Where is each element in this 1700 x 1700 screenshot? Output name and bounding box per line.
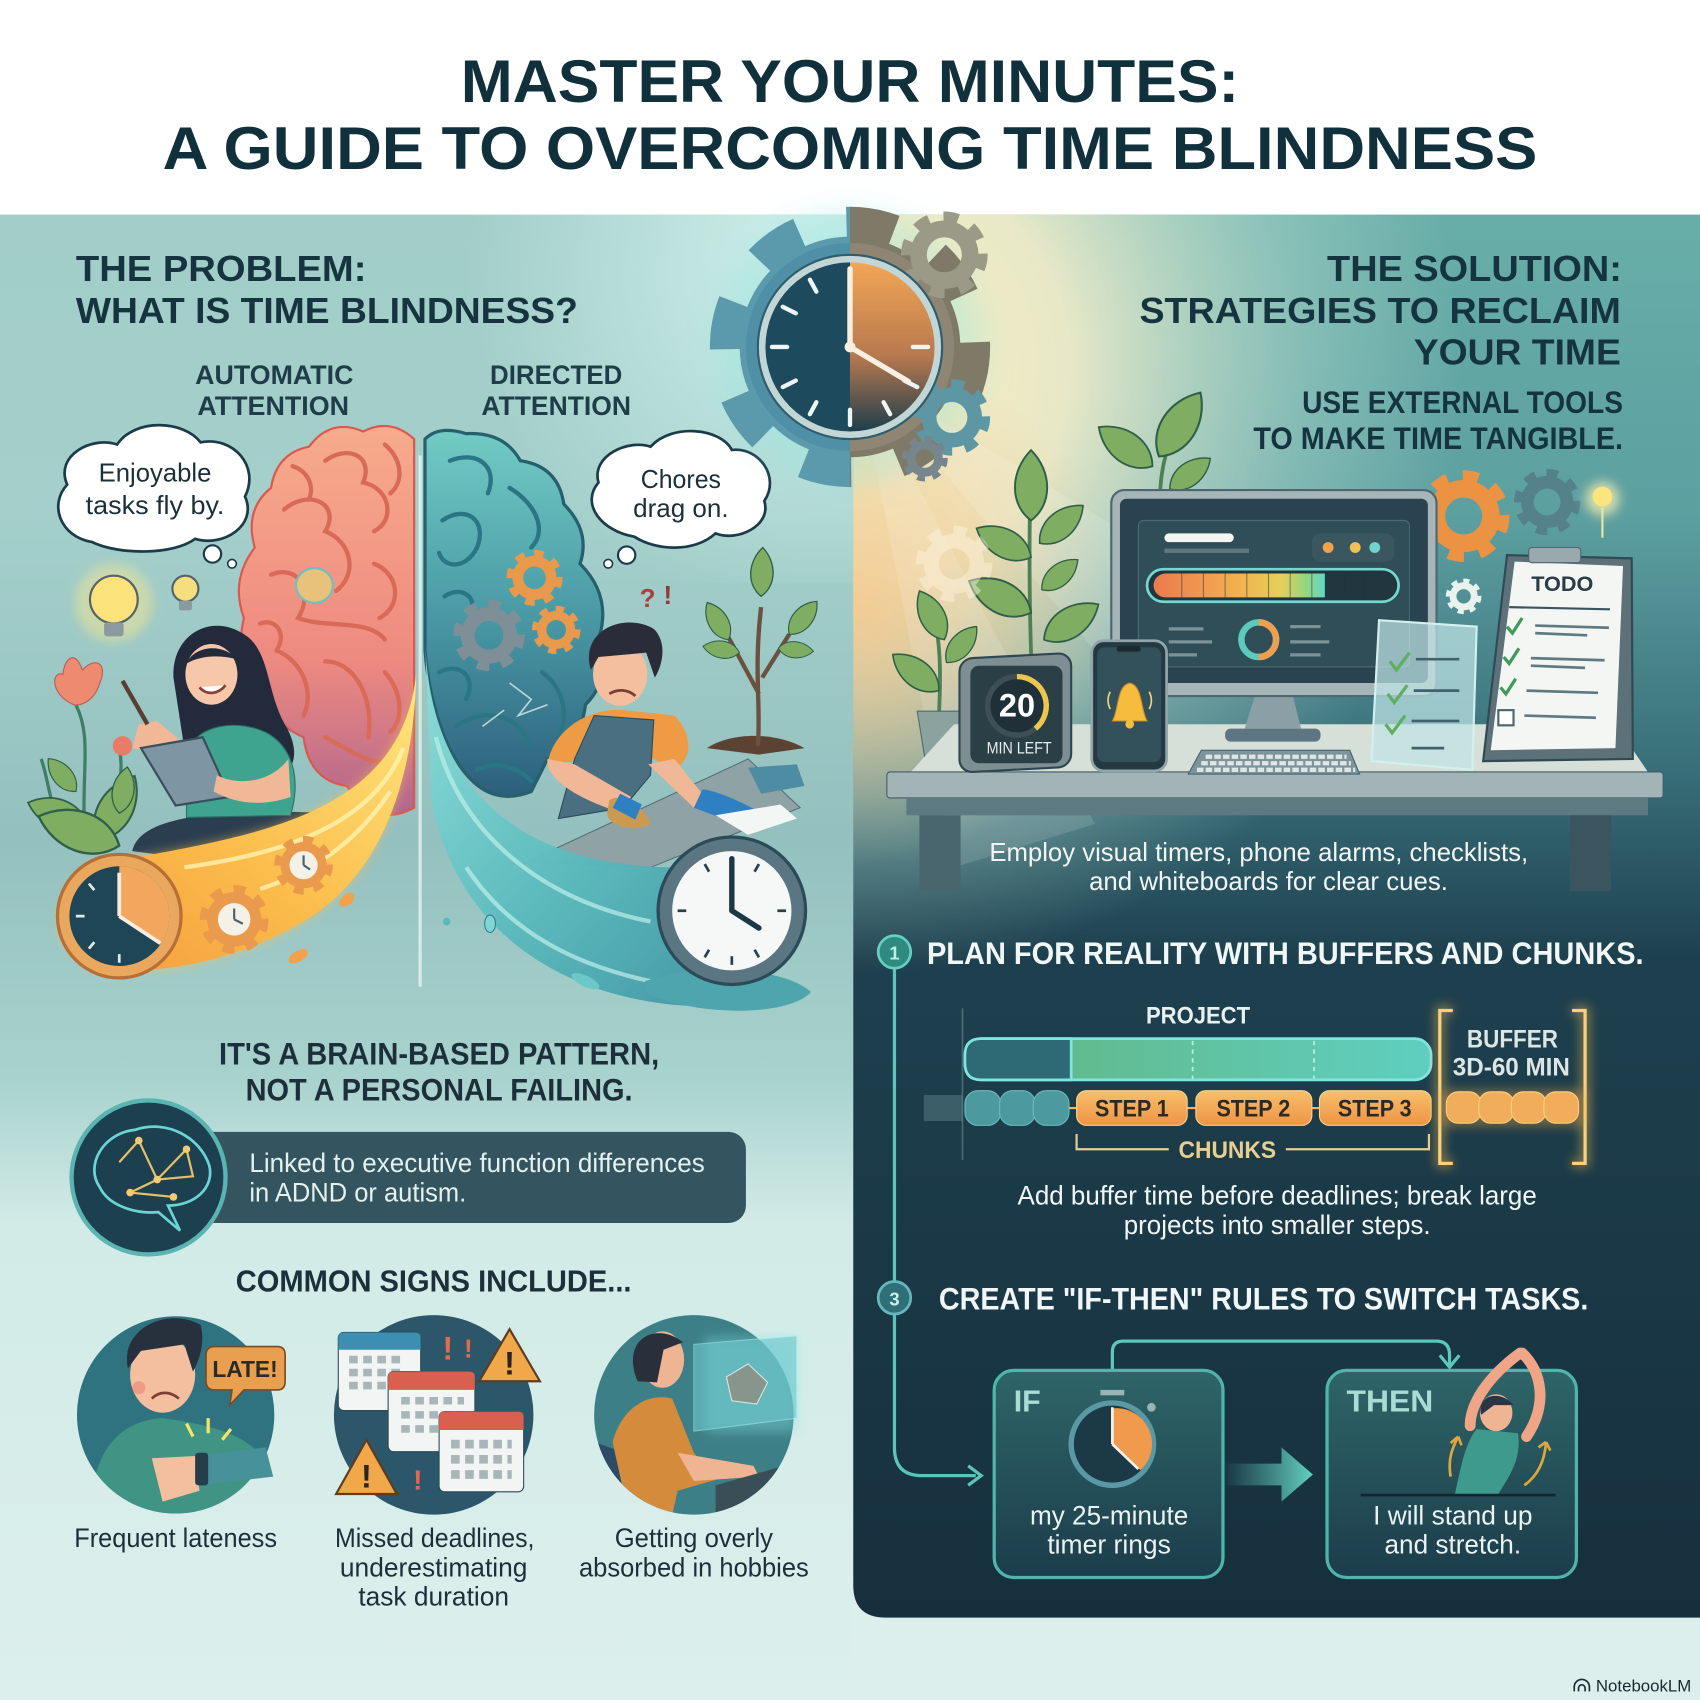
panel: if: timer rings (1047, 1529, 1171, 1560)
illustration: plants (885, 383, 1217, 764)
step marker 3: 3 (889, 1288, 900, 1309)
icon: orange and teal gears (1425, 474, 1620, 611)
panel: then (1327, 1353, 1576, 1577)
caption: missed deadlines: task duration (358, 1581, 509, 1612)
callout: executive function: Linked to executive function differences (249, 1147, 705, 1178)
steps: chunks: STEP 3 (1338, 1096, 1412, 1123)
label: directed attention: DIRECTED (490, 359, 622, 390)
heading: the solution: YOUR TIME (1414, 332, 1621, 372)
panel: if: my 25-minute (1030, 1499, 1188, 1530)
speech cloud: enjoyable tasks (58, 425, 249, 568)
panel: if: IF (1014, 1386, 1041, 1419)
buffer block: 3D-60 MIN (1453, 1054, 1570, 1082)
icon: small gears (905, 218, 984, 478)
illustration: tired brain (425, 430, 603, 796)
buffer block (1440, 1010, 1585, 1163)
icon: missed deadlines: ! (504, 1346, 515, 1382)
speech cloud: enjoyable tasks: Enjoyable (99, 457, 211, 487)
icon: visual timer: MIN LEFT (987, 740, 1052, 758)
steps: chunks: STEP 2 (1216, 1096, 1290, 1123)
icon: missed deadlines: ! (361, 1458, 372, 1494)
project bar (965, 1039, 1431, 1080)
icon: visual timer (960, 653, 1071, 773)
caption: missed deadlines: underestimating (340, 1551, 527, 1582)
step marker 1: 1 (889, 943, 900, 964)
icon: todo clipboard (1483, 548, 1633, 761)
label: project: PROJECT (1146, 1002, 1250, 1029)
step marker 1 (878, 936, 911, 968)
title: MASTER YOUR MINUTES: (461, 47, 1239, 115)
text: employ visual timers: Employ visual timers, phone alarms, checklists, (989, 837, 1528, 867)
speech cloud: chores drag on: drag on. (633, 493, 729, 523)
illustration: joyful brain (239, 426, 414, 815)
statement: brain-based pattern: NOT A PERSONAL FAILING. (246, 1072, 633, 1107)
illustration: wiping man, table and tree: ? (640, 583, 656, 613)
icon: missed deadlines: ! (442, 1331, 453, 1367)
panel: if (994, 1370, 1223, 1577)
title (163, 47, 1537, 182)
illustration: flowers and foliage (23, 658, 149, 864)
heading: the problem: THE PROBLEM: (76, 249, 366, 289)
statement: brain-based pattern (219, 1037, 659, 1107)
illustration: yellow time ribbon (58, 672, 416, 970)
label: directed attention: ATTENTION (481, 390, 631, 421)
arrow: curved top connector (1112, 1341, 1459, 1370)
label: automatic attention (195, 359, 353, 421)
subheading: external tools: TO MAKE TIME TANGIBLE. (1253, 421, 1623, 456)
icon: slow clock (645, 837, 811, 1011)
arrow: timeline connector (894, 968, 981, 1485)
speech cloud: chores drag on: Chores (641, 464, 721, 494)
dots: teal segments (924, 1091, 1069, 1125)
icon: todo clipboard: TODO (1531, 571, 1593, 596)
subheading: external tools (1253, 385, 1623, 456)
caption: missed deadlines: Missed deadlines, (335, 1522, 535, 1553)
caption: frequent lateness: Frequent lateness (74, 1522, 277, 1553)
illustration: water time ribbon (425, 640, 770, 1006)
caption: absorbed in hobbies (579, 1522, 809, 1582)
step marker 3 (878, 1282, 911, 1314)
heading: common signs: COMMON SIGNS INCLUDE... (236, 1265, 632, 1298)
text: employ visual timers (989, 837, 1528, 896)
speech cloud: chores drag on (592, 431, 770, 568)
label: automatic attention: ATTENTION (197, 390, 349, 421)
icon: faded gear (922, 531, 987, 596)
subheading: external tools: USE EXTERNAL TOOLS (1302, 385, 1623, 420)
caption: absorbed in hobbies: absorbed in hobbies (579, 1551, 809, 1582)
callout: late (206, 1347, 285, 1405)
buffer block: BUFFER (1467, 1025, 1558, 1053)
illustration: wiping man, table and tree (527, 547, 824, 867)
panel: then: THEN (1347, 1386, 1433, 1419)
icon: absorbed in hobbies (594, 1315, 797, 1516)
label: automatic attention: AUTOMATIC (195, 359, 353, 390)
callout: executive function: in ADND or autism. (249, 1176, 466, 1207)
icon: missed deadlines: ! (413, 1464, 422, 1496)
icon: fast clock (57, 854, 181, 978)
callout: executive function (72, 1100, 746, 1254)
panel: solution background (853, 215, 1700, 1618)
icon: glowing brain (72, 1100, 226, 1254)
heading: the problem: WHAT IS TIME BLINDNESS? (76, 291, 578, 331)
icon: stopwatch (1071, 1390, 1156, 1485)
heading: plan for reality: PLAN FOR REALITY WITH BUFFERS AND CHUNKS. (927, 936, 1644, 971)
steps: chunks: STEP 1 (1095, 1096, 1169, 1123)
illustration: wiping man, table and tree: ! (664, 580, 672, 610)
icon: phone alarm (1092, 641, 1167, 771)
heading: the problem (76, 249, 578, 331)
icon: missed deadlines: ! (464, 1333, 473, 1363)
text: add buffer time: Add buffer time before deadlines; break large (1018, 1180, 1537, 1211)
icon: frequent lateness (77, 1316, 285, 1518)
bracket: chunks: CHUNKS (1179, 1137, 1276, 1164)
icon: keyboard (1188, 750, 1360, 774)
heading: the solution: STRATEGIES TO RECLAIM (1139, 291, 1621, 331)
panel: then: and stretch. (1385, 1529, 1521, 1560)
text: add buffer time: projects into smaller steps. (1124, 1209, 1431, 1240)
icon: stretching person (1361, 1353, 1556, 1495)
text: employ visual timers: and whiteboards for clear cues. (1089, 866, 1448, 896)
heading: the solution (1139, 249, 1622, 372)
heading: the solution: THE SOLUTION: (1327, 249, 1622, 289)
icon: missed deadlines (334, 1315, 540, 1515)
heading: if-then rules: CREATE "IF-THEN" RULES TO SWITCH TASKS. (939, 1282, 1588, 1317)
label: directed attention (481, 359, 631, 421)
speech cloud: enjoyable tasks: tasks fly by. (86, 490, 224, 520)
illustration: monitor dashboard (1111, 490, 1437, 742)
icon: central gear clock (714, 211, 986, 482)
illustration: woman painting on tablet (123, 626, 331, 857)
logo: notebooklm: NotebookLM (1596, 1677, 1691, 1695)
arrow: if to then (1223, 1447, 1313, 1502)
caption: missed deadlines (335, 1522, 535, 1612)
icon: visual timer: 20 (999, 688, 1035, 724)
bracket: chunks (1077, 1134, 1429, 1164)
panel: then: I will stand up (1373, 1499, 1532, 1530)
callout: late: LATE! (212, 1356, 278, 1382)
title: A GUIDE TO OVERCOMING TIME BLINDNESS (163, 114, 1537, 182)
divider (418, 455, 422, 987)
panel: problem background (0, 215, 853, 1700)
statement: brain-based pattern: IT'S A BRAIN-BASED PATTERN, (219, 1037, 659, 1072)
text: add buffer time (1018, 1180, 1537, 1240)
steps: chunks (1069, 1091, 1431, 1125)
icon: light bulbs (75, 564, 198, 642)
caption: absorbed in hobbies: Getting overly (615, 1522, 773, 1553)
illustration: desk (887, 724, 1663, 891)
icon: glass checklist (1371, 620, 1477, 770)
icon: small gears with clocks (205, 840, 329, 949)
chart: project timeline (924, 1002, 1585, 1164)
